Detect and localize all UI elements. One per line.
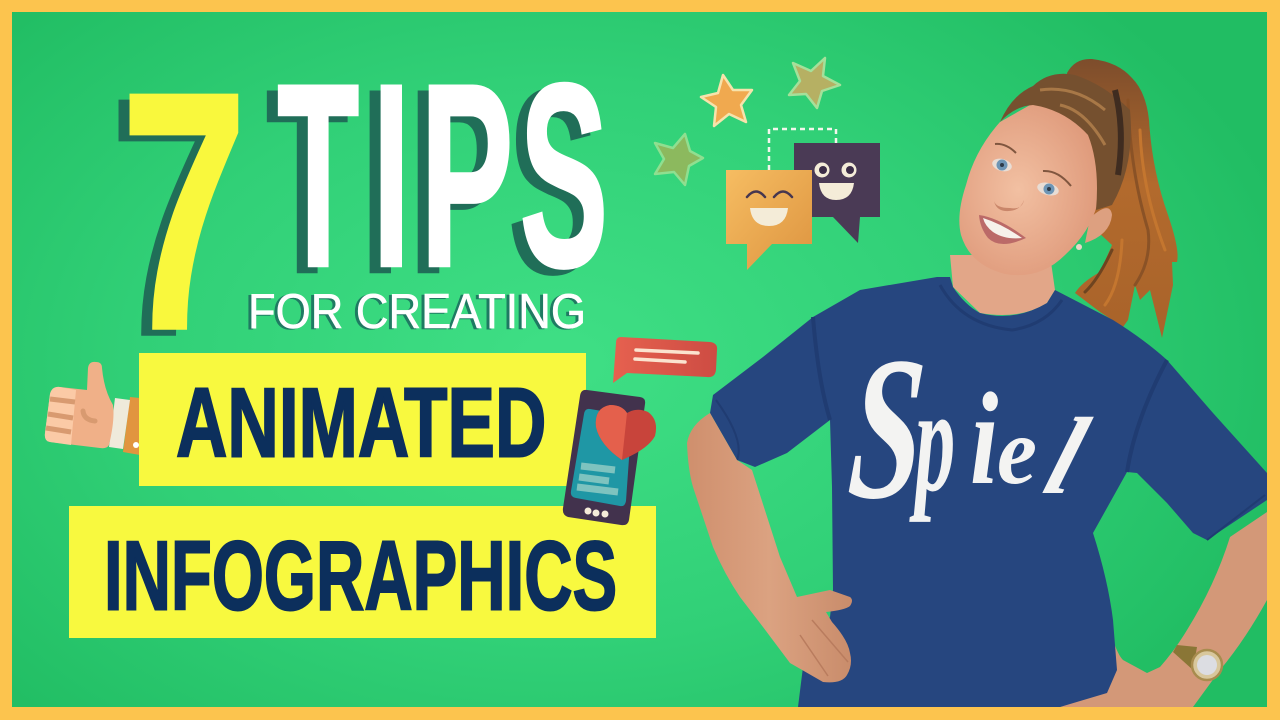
icon: olive star left [655,134,703,185]
shirt logo: p [909,357,955,522]
ponytail strands [1085,100,1165,305]
yellow box: INFOGRAPHICS [69,506,656,638]
title word TIPS shadow: T [266,35,348,328]
wristwatch [1173,645,1222,680]
icon: red speech bubble [613,337,717,383]
nose [994,200,1024,211]
face [959,104,1100,275]
ear [1085,208,1112,243]
icon: thumbs up [45,362,140,455]
shirt logo: i [970,366,999,512]
neck [950,255,1055,315]
thumbnail canvas: P [409,35,503,328]
left eye [991,157,1013,173]
icon: olive star right [789,58,840,108]
thumbnail canvas: P [420,29,514,322]
icon: orange star [701,75,752,126]
earring [1076,244,1082,250]
icon: phone with heart [563,390,656,525]
shirt logo: l [1032,395,1101,517]
shirt logo [843,315,1101,542]
thumbnail canvas: 7 [121,22,247,400]
right arm [1060,512,1267,707]
title word TIPS [277,29,608,322]
t-shirt [710,277,1267,707]
icon: chat bubbles [726,129,880,270]
right eye [1036,180,1060,198]
title word TIPS: I [372,29,411,322]
title word TIPS shadow [266,35,597,328]
title word TIPS: T [277,29,359,322]
yellow box: ANIMATED [139,353,586,486]
ponytail [1067,59,1178,338]
title word TIPS shadow: I [361,35,400,328]
title number 7 [110,22,247,406]
subtitle FOR CREATING: FOR CREATING [245,286,583,340]
finger lines [800,620,848,676]
thumbnail canvas: S [508,35,597,328]
shirt logo: S [843,315,932,542]
person: woman in Spiel t-shirt [687,59,1267,707]
front hair [1000,74,1131,210]
eyebrows [995,144,1071,186]
thumbnail canvas: 7 [110,28,236,406]
subtitle FOR CREATING: FOR CREATING [248,285,586,339]
hair highlights [1040,89,1105,145]
mouth [979,215,1026,244]
left arm and hand [687,413,852,682]
thumbnail canvas: S [520,29,608,322]
shirt shading [716,285,1265,540]
shirt logo: e [997,400,1037,505]
